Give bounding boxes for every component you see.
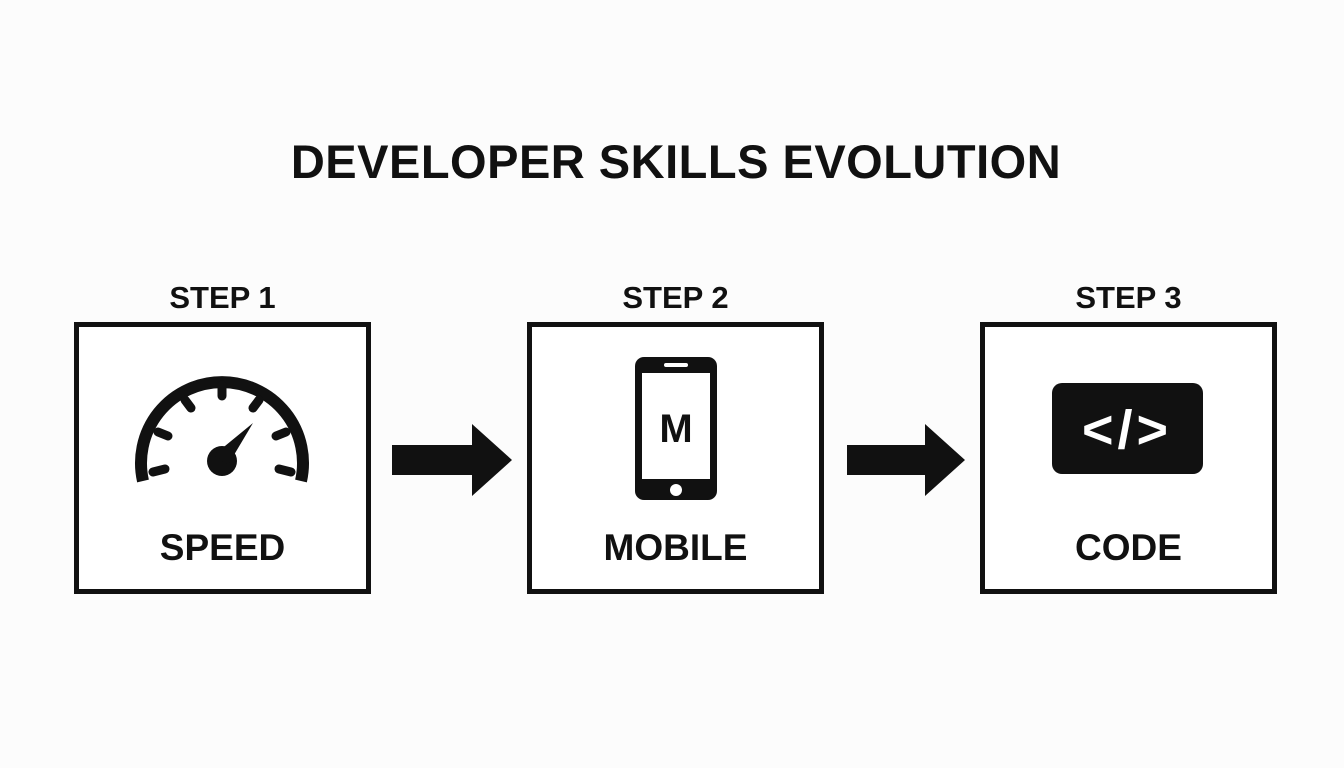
arrow 2	[847, 424, 965, 496]
step 1 label: STEP 1	[169, 280, 276, 315]
panel: mobile	[527, 322, 824, 594]
icon: code: </>	[1082, 400, 1172, 460]
title: DEVELOPER SKILLS EVOLUTION	[291, 135, 1061, 188]
icon: phone	[635, 357, 717, 500]
icon: speedometer	[141, 382, 303, 481]
label: speed: SPEED	[160, 527, 285, 568]
label: code: CODE	[1075, 527, 1182, 568]
panel: speed	[74, 322, 371, 594]
step 3 label: STEP 3	[1075, 280, 1182, 315]
arrow 1	[392, 424, 512, 496]
step 2 label: STEP 2	[622, 280, 729, 315]
icon: phone: M	[659, 407, 693, 451]
panel: code	[980, 322, 1277, 594]
icon: code	[1052, 383, 1203, 474]
label: mobile: MOBILE	[604, 527, 747, 568]
